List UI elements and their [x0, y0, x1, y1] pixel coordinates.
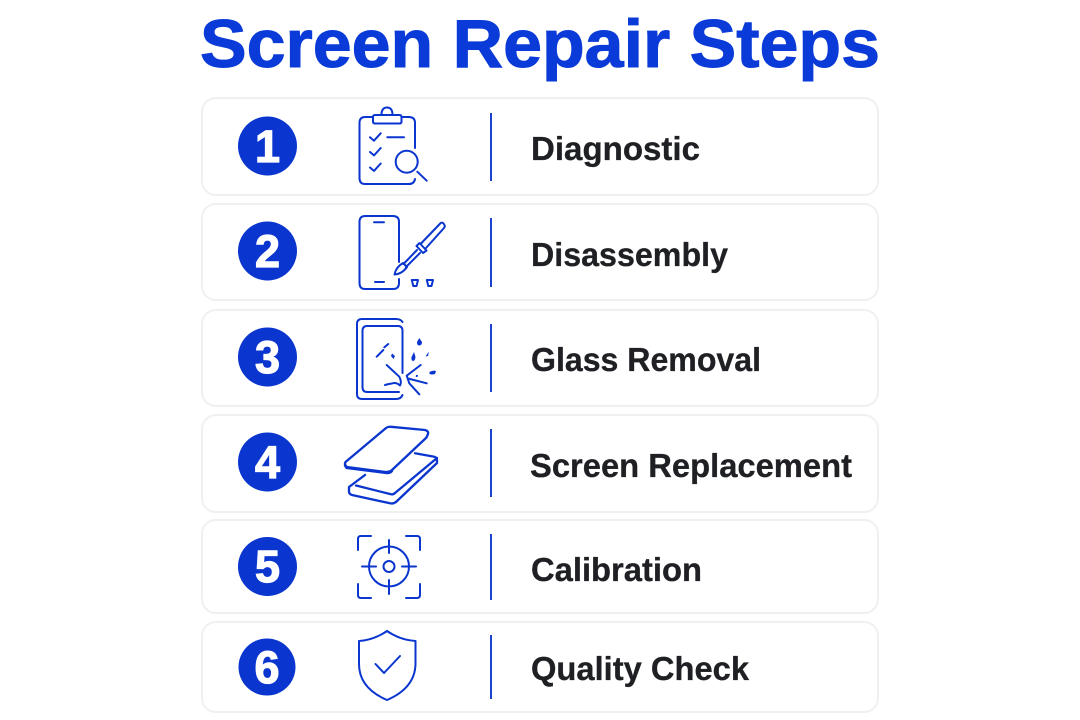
icon: clipboard with magnifier — [360, 108, 427, 184]
number badge 6 — [238, 638, 296, 696]
panel: step 6 quality check — [202, 622, 878, 712]
panel: step 5 calibration — [202, 520, 878, 613]
icon: shield with check — [359, 631, 416, 700]
icon: calibration target — [358, 536, 420, 598]
divider — [490, 429, 492, 497]
number badge 1 — [238, 116, 297, 176]
number badge 5: 5 — [255, 541, 280, 592]
divider — [490, 113, 492, 181]
label: Disassembly — [531, 236, 729, 273]
panel: step 4 screen replacement — [202, 415, 878, 512]
panel: step 1 diagnostic — [202, 98, 878, 195]
number badge 5 — [238, 537, 297, 596]
divider — [490, 534, 492, 600]
number badge 3: 3 — [255, 332, 280, 383]
number badge 2 — [238, 222, 297, 280]
icon: phone and screwdriver — [360, 216, 445, 289]
label: Screen Replacement — [530, 447, 852, 484]
title: Screen Repair Steps — [200, 6, 880, 82]
icon: screen layers — [345, 427, 437, 503]
label: Calibration — [531, 551, 702, 588]
divider — [490, 635, 492, 699]
number badge 6: 6 — [254, 642, 280, 693]
number badge 4: 4 — [255, 437, 280, 488]
number badge 2: 2 — [255, 226, 280, 277]
number badge 3 — [238, 328, 297, 386]
divider — [490, 218, 492, 287]
icon: cracked glass phone — [357, 319, 436, 399]
panel: step 2 disassembly — [202, 204, 878, 300]
label: Diagnostic — [531, 130, 700, 167]
panel: step 3 glass removal — [202, 310, 878, 406]
number badge 1: 1 — [255, 121, 280, 172]
label: Glass Removal — [531, 341, 761, 378]
label: Quality Check — [531, 650, 750, 687]
number badge 4 — [238, 432, 297, 492]
divider — [490, 324, 492, 392]
